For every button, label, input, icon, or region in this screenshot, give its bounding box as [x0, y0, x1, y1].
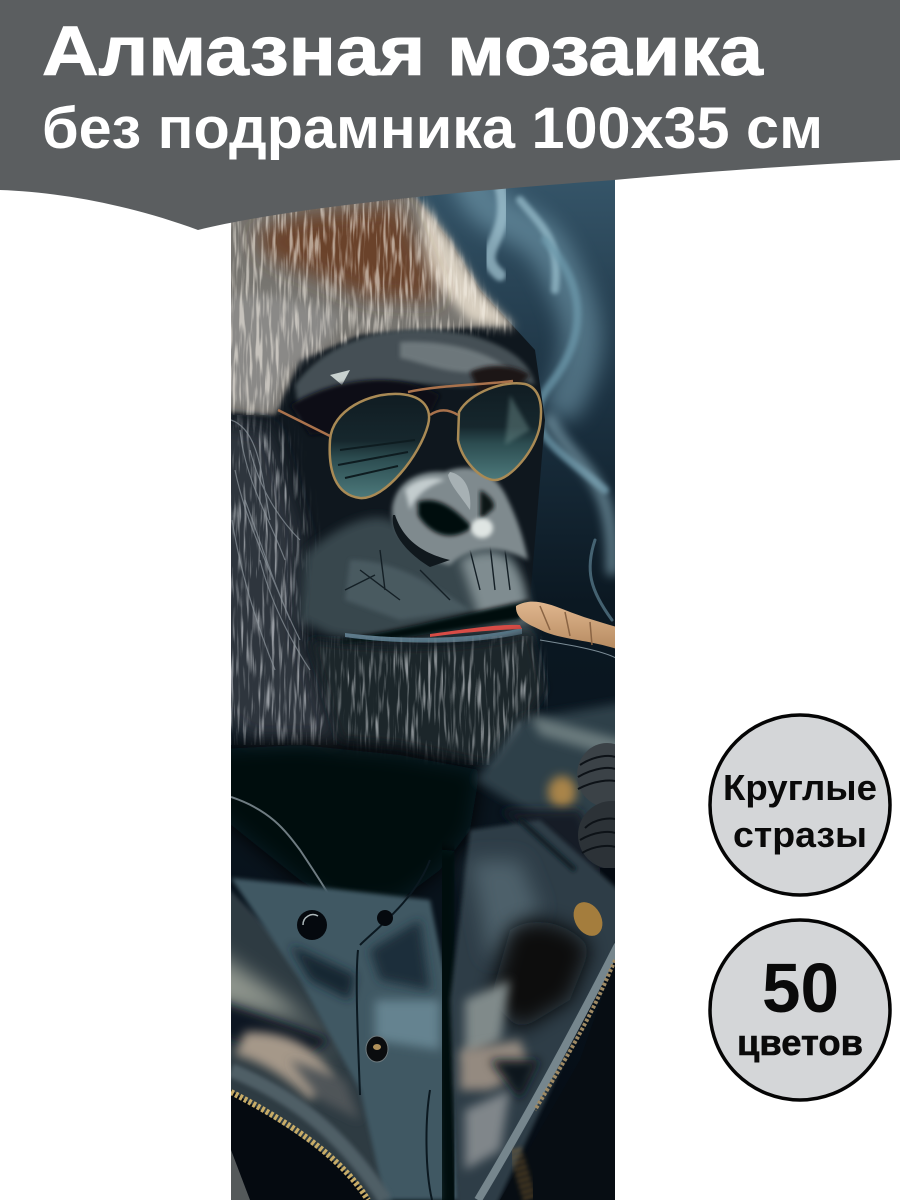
left lens — [330, 394, 429, 498]
shirt — [231, 850, 460, 1200]
beard — [310, 632, 548, 770]
mouth and lips — [340, 600, 530, 645]
badge: 50 colours: 50 — [762, 949, 839, 1027]
bridge and temple — [278, 381, 513, 436]
left zipper and dark lower corner — [231, 1070, 385, 1200]
badge: 50 colours — [710, 920, 890, 1100]
muzzle — [300, 517, 535, 640]
dark neck — [200, 745, 480, 905]
glasses — [278, 381, 541, 498]
glove — [577, 743, 615, 884]
right lens — [458, 383, 541, 480]
side fur — [231, 408, 338, 745]
badge: round rhinestones: стразы — [733, 814, 867, 855]
smoke — [470, 170, 612, 620]
shirt buttons — [297, 910, 393, 1062]
cigar — [516, 602, 620, 658]
gold snap — [574, 902, 602, 936]
subtitle: без подрамника 100х35 см — [42, 96, 823, 161]
badge: round rhinestones: Круглые — [723, 767, 877, 808]
jacket collar right — [474, 700, 615, 872]
badge: 50 colours: цветов — [737, 1022, 863, 1063]
title: Алмазная мозаика — [42, 12, 764, 90]
right jacket — [450, 820, 630, 1200]
header banner — [0, 0, 900, 230]
gorilla artwork panel — [231, 180, 615, 1200]
badge: round rhinestones — [710, 715, 890, 895]
brow and forehead — [290, 329, 535, 435]
nose — [392, 468, 528, 567]
head fur — [231, 196, 545, 576]
left jacket and lapel — [231, 796, 393, 1200]
